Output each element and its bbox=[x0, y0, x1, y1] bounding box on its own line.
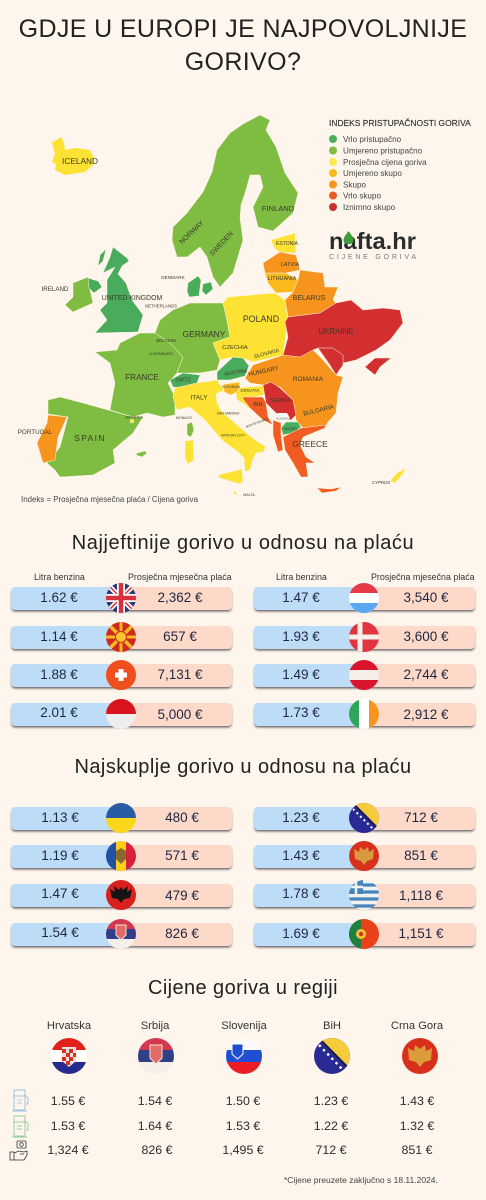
map labels: CYPRUS bbox=[372, 480, 390, 485]
legend items: Vrlo pristupačno bbox=[343, 135, 402, 144]
map region: very accessible and moderate countries bbox=[47, 115, 298, 477]
region column: Crna Gora: 1.43 € bbox=[400, 1094, 434, 1108]
heading: cheapest: Najjeftinije gorivo u odnosu na plaću bbox=[72, 532, 414, 554]
logo: nafta.hr: nafta.hr bbox=[329, 228, 416, 254]
map labels: AUSTRIA bbox=[224, 368, 248, 378]
map region: moderately expensive countries bbox=[224, 273, 298, 395]
legend items: Iznimno skupo bbox=[343, 203, 396, 212]
row: North Macedonia: 1.14 € bbox=[40, 629, 78, 644]
region column: Crna Gora: 1.32 € bbox=[400, 1119, 434, 1133]
map labels: BIH bbox=[253, 402, 263, 408]
row: Monaco: 2.01 € bbox=[40, 705, 78, 720]
legend items bbox=[329, 135, 427, 212]
map labels: BELGIUM bbox=[156, 338, 176, 343]
map labels: POLAND bbox=[243, 314, 279, 324]
title bbox=[19, 15, 467, 76]
region column: BiH bbox=[314, 1020, 350, 1157]
row: Greece: 1.78 € bbox=[282, 886, 320, 901]
row: Luxembourg: 3,540 € bbox=[403, 590, 449, 605]
row: Luxembourg: 1.47 € bbox=[282, 590, 320, 605]
map labels: VATICAN CITY bbox=[221, 434, 246, 438]
map labels: LATVIA bbox=[281, 262, 300, 268]
map labels: CZECHIA bbox=[222, 345, 248, 351]
heading: region: Cijene goriva u regiji bbox=[148, 977, 338, 999]
row: Ukraine: 480 € bbox=[165, 810, 199, 825]
row: Albania: 479 € bbox=[165, 888, 199, 903]
row: Bosnia and Herzegovina bbox=[253, 803, 476, 834]
region column: BiH: 1.22 € bbox=[314, 1119, 348, 1133]
row: Denmark bbox=[253, 622, 476, 652]
map labels: DENMARK bbox=[161, 275, 186, 280]
map labels: LUXEMBURG bbox=[149, 352, 173, 356]
title: GDJE U EUROPI JE NAJPOVOLJNIJE bbox=[19, 15, 467, 43]
map labels: LITHUANIA bbox=[268, 276, 297, 282]
row: North Macedonia: 657 € bbox=[163, 629, 197, 644]
icon: petrol pump bbox=[12, 1090, 28, 1112]
map region: average priced countries bbox=[130, 233, 406, 495]
map labels: FRANCE bbox=[125, 373, 159, 382]
region column: Slovenija: 1,495 € bbox=[222, 1143, 264, 1157]
region column: BiH: 712 € bbox=[315, 1143, 346, 1157]
region column: Hrvatska: 1.55 € bbox=[51, 1094, 85, 1108]
region column: Srbija: Srbija bbox=[141, 1020, 169, 1032]
map labels: ANDORRA bbox=[125, 416, 144, 420]
map labels: FINLAND bbox=[262, 204, 295, 213]
map labels: SLOVENIA bbox=[222, 385, 241, 389]
map region: extremely expensive countries bbox=[263, 300, 403, 420]
legend items: Umjereno pristupačno bbox=[343, 146, 423, 156]
legend items: Umjereno skupo bbox=[343, 169, 402, 178]
column captions: cheapest left: Prosječna mjesečna plaća bbox=[128, 572, 232, 582]
row: Greece bbox=[253, 880, 476, 910]
map labels bbox=[18, 156, 390, 497]
region column: Srbija: 1.64 € bbox=[138, 1119, 172, 1133]
region column: Slovenija: 1.50 € bbox=[226, 1094, 260, 1108]
legend title: INDEKS PRISTUPAČNOSTI GORIVA bbox=[329, 118, 471, 128]
legend items: Vrlo skupo bbox=[343, 192, 381, 200]
map labels: NETHERLANDS bbox=[145, 304, 177, 308]
row: Bosnia and Herzegovina: 1.23 € bbox=[282, 810, 320, 825]
map labels: SLOVAKIA bbox=[253, 348, 280, 360]
map labels: IRELAND bbox=[42, 286, 69, 293]
row: Denmark: 3,600 € bbox=[403, 629, 449, 644]
row: Austria bbox=[253, 660, 476, 690]
region column: Srbija: 1.54 € bbox=[138, 1094, 172, 1108]
map labels: ICELAND bbox=[62, 156, 98, 166]
column captions: cheapest left: Litra benzina bbox=[34, 572, 85, 582]
icon: hand with money bbox=[10, 1140, 28, 1160]
map labels: MONTENEGRO bbox=[245, 417, 269, 429]
row: Ukraine bbox=[10, 803, 233, 834]
row: Luxembourg bbox=[253, 583, 476, 614]
region column: Srbija: 826 € bbox=[141, 1143, 172, 1157]
row: Monaco bbox=[10, 699, 233, 730]
map labels: SWITZ bbox=[175, 378, 191, 384]
map index note: Indeks = Prosječna mjesečna plaća / Cijena goriva bbox=[21, 495, 198, 504]
row: Serbia: 1.54 € bbox=[41, 925, 79, 940]
map of Europe bbox=[18, 115, 406, 497]
map labels: KOSOVO bbox=[276, 416, 290, 420]
region column: Hrvatska: Hrvatska bbox=[47, 1020, 91, 1032]
row: United Kingdom: 2,362 € bbox=[157, 590, 203, 605]
region column: Slovenija: 1.53 € bbox=[226, 1119, 260, 1133]
map labels: GERMANY bbox=[183, 329, 226, 339]
legend items: Skupo bbox=[343, 180, 366, 190]
map region: expensive countries bbox=[37, 252, 343, 463]
row: Portugal bbox=[253, 919, 476, 950]
map labels: CROATIA bbox=[240, 388, 260, 393]
title: GORIVO? bbox=[185, 48, 301, 76]
row: Denmark: 1.93 € bbox=[282, 629, 320, 644]
region column: Slovenija bbox=[221, 1020, 267, 1157]
map labels: ROMANIA bbox=[293, 376, 324, 383]
map labels: HUNGARY bbox=[248, 365, 280, 378]
region column: Crna Gora bbox=[391, 1020, 444, 1157]
map labels: SERBIA bbox=[270, 398, 290, 404]
map labels: ITALY bbox=[190, 394, 208, 402]
map labels: NORWAY bbox=[178, 220, 206, 246]
map labels: MACED. bbox=[284, 427, 298, 431]
map labels: UKRAINE bbox=[318, 327, 354, 336]
logo: nafta.hr: CIJENE GORIVA bbox=[329, 254, 416, 261]
row: Switzerland bbox=[10, 660, 233, 690]
region column: Srbija bbox=[138, 1020, 174, 1157]
row: Moldova bbox=[10, 841, 233, 872]
map labels: PORTUGAL bbox=[18, 429, 53, 436]
row: Bosnia and Herzegovina: 712 € bbox=[404, 810, 438, 825]
map labels: MALTA bbox=[243, 493, 255, 497]
row: Moldova: 1.19 € bbox=[41, 848, 79, 863]
region column: BiH: 1.23 € bbox=[314, 1094, 348, 1108]
map labels: MONACO bbox=[176, 416, 192, 420]
map labels: ESTONIA bbox=[276, 241, 299, 247]
row: Serbia bbox=[10, 919, 233, 950]
row: Austria: 1.49 € bbox=[282, 667, 320, 682]
row: Austria: 2,744 € bbox=[403, 667, 449, 682]
row: United Kingdom bbox=[10, 583, 233, 614]
row: Serbia: 826 € bbox=[165, 926, 199, 941]
row: Switzerland: 1.88 € bbox=[40, 667, 78, 682]
map labels: BELARUS bbox=[293, 295, 326, 302]
row: Portugal: 1.69 € bbox=[282, 926, 320, 941]
region column: Hrvatska: 1,324 € bbox=[47, 1143, 89, 1157]
row: North Macedonia bbox=[10, 622, 233, 652]
map labels: SPAIN bbox=[74, 433, 106, 443]
footnote: *Cijene preuzete zaključno s 18.11.2024. bbox=[284, 1175, 438, 1185]
heading: most expensive: Najskuplje gorivo u odnosu na plaću bbox=[74, 756, 412, 778]
row: Albania bbox=[10, 880, 233, 910]
map labels: GREECE bbox=[292, 439, 328, 449]
legend bbox=[329, 118, 471, 212]
region column: Crna Gora: Crna Gora bbox=[391, 1020, 443, 1032]
row: Montenegro: 851 € bbox=[404, 848, 438, 863]
legend items: Prosječna cijena goriva bbox=[343, 158, 427, 167]
region column: BiH: BiH bbox=[323, 1020, 341, 1032]
column captions: cheapest right bbox=[276, 572, 475, 582]
map labels: UNITED KINGDOM bbox=[102, 295, 162, 302]
map labels: BULGARIA bbox=[303, 403, 336, 418]
region column: Slovenija: Slovenija bbox=[221, 1020, 267, 1032]
row: Switzerland: 7,131 € bbox=[157, 667, 203, 682]
row: Montenegro bbox=[253, 841, 476, 872]
row: Moldova: 571 € bbox=[165, 848, 199, 863]
row: Monaco: 5,000 € bbox=[157, 707, 203, 722]
column captions: cheapest left bbox=[34, 572, 232, 582]
row: Ireland: 1.73 € bbox=[282, 705, 320, 720]
row: Ireland bbox=[253, 699, 476, 730]
row: Ukraine: 1.13 € bbox=[41, 810, 79, 825]
icon: diesel pump bbox=[12, 1116, 28, 1138]
row: United Kingdom: 1.62 € bbox=[40, 590, 78, 605]
region column: Hrvatska: 1.53 € bbox=[51, 1119, 85, 1133]
column captions: cheapest right: Prosječna mjesečna plaća bbox=[371, 572, 475, 582]
column captions: cheapest right: Litra benzina bbox=[276, 572, 327, 582]
map labels: SWEDEN bbox=[209, 230, 235, 258]
region column: Hrvatska bbox=[47, 1020, 92, 1157]
row: Greece: 1,118 € bbox=[399, 888, 443, 903]
row: Ireland: 2,912 € bbox=[403, 707, 449, 722]
row: Montenegro: 1.43 € bbox=[282, 848, 320, 863]
row: Portugal: 1,151 € bbox=[398, 926, 444, 941]
map labels: SAN MARINO bbox=[217, 412, 240, 416]
row: Albania: 1.47 € bbox=[41, 886, 79, 901]
map region: very expensive countries bbox=[243, 397, 341, 493]
region column: Crna Gora: 851 € bbox=[401, 1143, 432, 1157]
